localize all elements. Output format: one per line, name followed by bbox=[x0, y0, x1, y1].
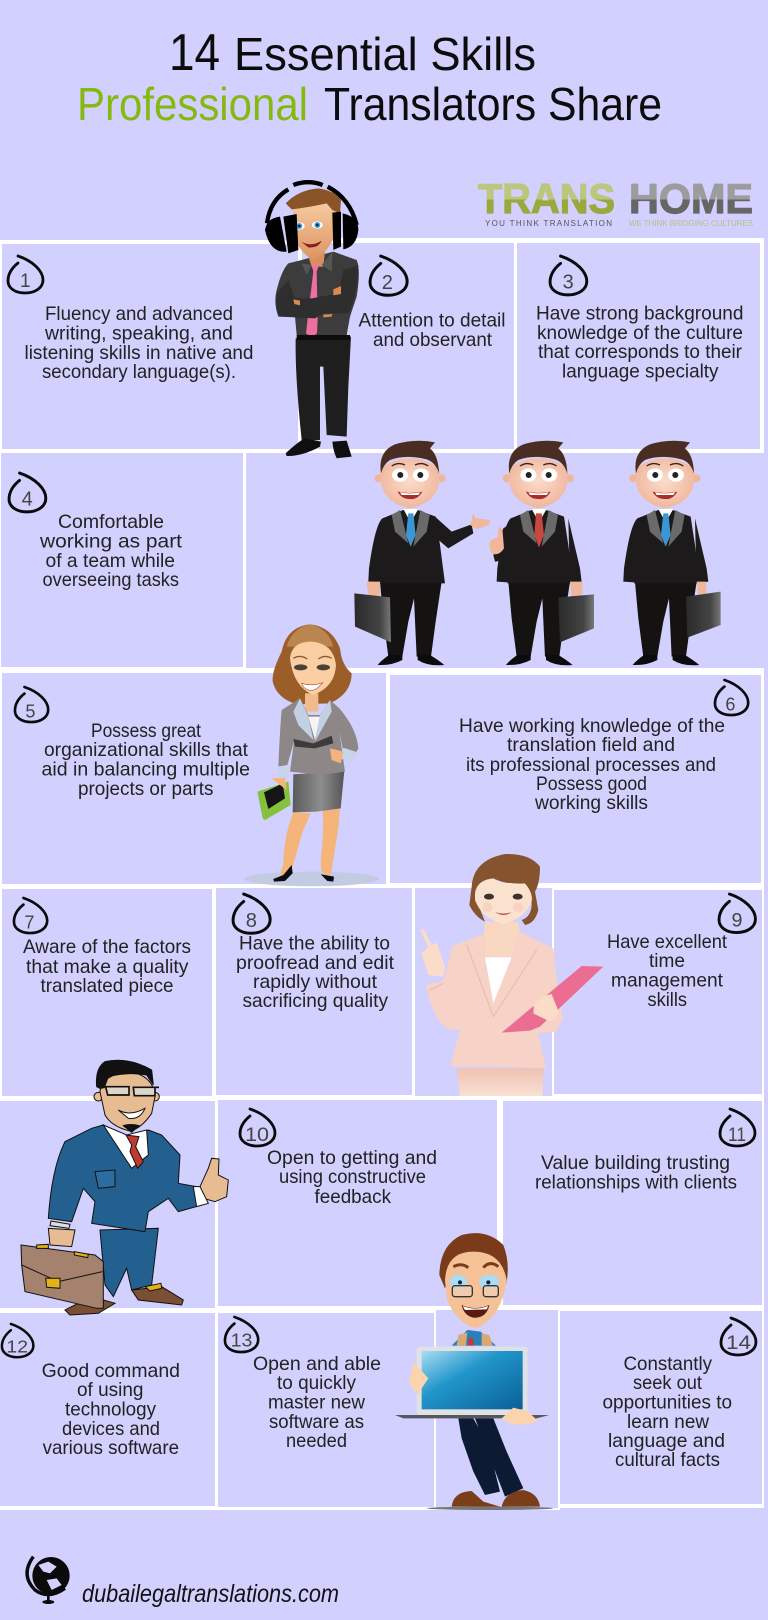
text 6: working skills bbox=[534, 792, 648, 814]
panel: businessman backdrop bbox=[0, 1101, 215, 1308]
title: 14 bbox=[169, 24, 220, 82]
panel 10 bbox=[218, 1100, 497, 1306]
text 9: Have excellent bbox=[607, 931, 728, 953]
badge 14 bbox=[721, 1318, 756, 1355]
panel 13 bbox=[218, 1313, 434, 1507]
text 13: needed bbox=[286, 1430, 347, 1452]
text 5: Possess great bbox=[91, 720, 202, 742]
text 12: Good command bbox=[42, 1360, 180, 1382]
title: Essential Skills bbox=[234, 28, 536, 80]
text 1: Fluency and advanced bbox=[45, 303, 233, 325]
text 7: translated piece bbox=[40, 975, 174, 997]
panel 6 bbox=[390, 675, 761, 883]
text 2: and observant bbox=[373, 329, 493, 351]
figure: three businessmen with briefcases bbox=[354, 441, 721, 665]
text 5 bbox=[42, 720, 250, 800]
panel 4 bbox=[1, 453, 243, 667]
badge 11 bbox=[720, 1109, 755, 1146]
text 3: knowledge of the culture bbox=[537, 322, 743, 344]
panel 9 bbox=[554, 890, 762, 1094]
text 8: Have the ability to bbox=[239, 932, 390, 954]
logo: Trans Home: TRANS bbox=[478, 175, 615, 222]
text 8: proofread and edit bbox=[236, 952, 395, 974]
text 3 bbox=[536, 302, 744, 382]
text 12 bbox=[42, 1360, 180, 1459]
badge 3 bbox=[550, 256, 587, 295]
text 4: Comfortable bbox=[58, 511, 164, 533]
text 9: management bbox=[611, 970, 724, 992]
text 7 bbox=[23, 936, 191, 997]
text 12: various software bbox=[43, 1437, 179, 1459]
panel 14 bbox=[560, 1311, 762, 1504]
text 13: software as bbox=[269, 1411, 364, 1433]
text 14: cultural facts bbox=[615, 1449, 720, 1471]
figure: man holding laptop bbox=[395, 1233, 553, 1510]
white panel frame bbox=[0, 238, 764, 1510]
text 14: Constantly bbox=[624, 1353, 712, 1375]
text 2 bbox=[358, 310, 506, 351]
panel 1 bbox=[2, 244, 298, 449]
text 10 bbox=[267, 1147, 437, 1208]
text 7: Aware of the factors bbox=[23, 936, 191, 958]
badge 6 bbox=[715, 680, 748, 715]
text 5: projects or parts bbox=[78, 778, 214, 800]
badge 13: 13 bbox=[231, 1330, 252, 1350]
badge 7 bbox=[14, 898, 47, 933]
text 14 bbox=[602, 1353, 732, 1471]
text 12: devices and bbox=[62, 1418, 160, 1440]
text 11: relationships with clients bbox=[535, 1172, 737, 1194]
text 9: time bbox=[649, 950, 685, 972]
text 11 bbox=[535, 1152, 737, 1194]
text 6: translation field and bbox=[507, 734, 675, 756]
businessman 1 pointing bbox=[354, 441, 490, 665]
panel: team illustration backdrop bbox=[246, 453, 768, 668]
businessman 2 thumbs up bbox=[489, 441, 594, 665]
text 3: Have strong background bbox=[536, 302, 744, 324]
panel 11 bbox=[503, 1101, 762, 1305]
panel 2 bbox=[302, 243, 514, 449]
badge 8: 8 bbox=[246, 910, 257, 932]
badge 2 bbox=[370, 256, 407, 295]
text 2: Attention to detail bbox=[358, 310, 506, 332]
text 4 bbox=[39, 511, 183, 591]
text 5: aid in balancing multiple bbox=[42, 758, 250, 780]
panel 12 bbox=[0, 1313, 215, 1506]
text 13 bbox=[253, 1353, 381, 1452]
badge 4: 4 bbox=[22, 489, 33, 511]
text 4: overseeing tasks bbox=[42, 569, 179, 591]
logo: Trans Home bbox=[478, 175, 753, 228]
badge 11: 11 bbox=[728, 1125, 746, 1146]
panel: woman backdrop bbox=[415, 888, 552, 1096]
badge 2: 2 bbox=[382, 272, 393, 294]
title: Professional bbox=[77, 78, 308, 130]
figure: man with headphones bbox=[265, 182, 359, 458]
badge 12 bbox=[2, 1324, 33, 1357]
text 13: to quickly bbox=[277, 1372, 356, 1394]
logo: Trans Home: HOME bbox=[629, 175, 753, 222]
text 1: listening skills in native and bbox=[24, 342, 254, 364]
text 8: rapidly without bbox=[253, 971, 378, 993]
panel 8 bbox=[216, 888, 412, 1095]
footer: website: dubailegaltranslations.com bbox=[82, 1580, 339, 1608]
panel 5 bbox=[2, 673, 386, 884]
logo: Trans Home: YOU THINK TRANSLATION bbox=[485, 219, 612, 228]
businessman 3 bbox=[623, 441, 721, 665]
text 3: that corresponds to their bbox=[538, 341, 742, 363]
badge 12: 12 bbox=[6, 1338, 28, 1357]
logo: Trans Home: WE THINK BRIDGING CULTURES bbox=[629, 219, 753, 228]
text 9 bbox=[607, 931, 728, 1011]
badge 14: 14 bbox=[726, 1333, 752, 1354]
text 6: its professional processes and bbox=[466, 754, 716, 776]
text 6: Possess good bbox=[536, 773, 647, 795]
text 1 bbox=[24, 303, 254, 383]
text 12: technology bbox=[65, 1398, 156, 1420]
text 1: writing, speaking, and bbox=[44, 322, 233, 344]
text 10: Open to getting and bbox=[267, 1147, 437, 1169]
text 13: Open and able bbox=[253, 1353, 381, 1375]
figure: businesswoman with green folder bbox=[244, 624, 379, 886]
badge 1 bbox=[8, 256, 43, 293]
panel 7 bbox=[2, 889, 212, 1096]
text 10: feedback bbox=[314, 1186, 391, 1208]
text 8: sacrificing quality bbox=[242, 990, 388, 1012]
text 4: working as part bbox=[39, 530, 183, 552]
figure: woman in pink suit with clipboard bbox=[420, 854, 603, 1096]
title: Translators Share bbox=[324, 78, 662, 130]
title bbox=[77, 24, 662, 130]
text 4: of a team while bbox=[46, 550, 175, 572]
badge 8 bbox=[233, 894, 270, 933]
text 6: Have working knowledge of the bbox=[459, 715, 725, 737]
figure: businessman in blue suit with briefcase bbox=[21, 1060, 228, 1315]
badge 1: 1 bbox=[20, 271, 31, 292]
text 14: seek out bbox=[633, 1372, 703, 1394]
text 5: organizational skills that bbox=[44, 739, 249, 761]
panel 3 bbox=[517, 243, 760, 449]
badge 5: 5 bbox=[25, 701, 35, 721]
text 11: Value building trusting bbox=[541, 1152, 730, 1174]
panel: laptop man backdrop bbox=[436, 1310, 558, 1508]
text 13: master new bbox=[268, 1392, 366, 1414]
text 12: of using bbox=[77, 1379, 144, 1401]
badge 7: 7 bbox=[24, 912, 34, 932]
badge 9: 9 bbox=[732, 909, 743, 931]
text 14: learn new bbox=[627, 1411, 710, 1433]
badge 10 bbox=[240, 1109, 275, 1146]
footer: globe icon bbox=[27, 1557, 70, 1604]
badge 3: 3 bbox=[563, 272, 574, 294]
badge 9 bbox=[719, 894, 755, 933]
text 9: skills bbox=[648, 989, 687, 1011]
badge 10: 10 bbox=[245, 1125, 269, 1146]
text 14: language and bbox=[608, 1430, 725, 1452]
badge 5 bbox=[15, 687, 48, 722]
text 3: language specialty bbox=[562, 360, 719, 382]
text 1: secondary language(s). bbox=[42, 361, 236, 383]
badge 6: 6 bbox=[725, 694, 735, 714]
text 8 bbox=[236, 932, 395, 1012]
badge 13 bbox=[225, 1317, 258, 1352]
text 10: using constructive bbox=[279, 1166, 426, 1188]
text 6 bbox=[459, 715, 725, 814]
text 7: that make a quality bbox=[26, 956, 189, 978]
badge 4 bbox=[9, 473, 46, 512]
text 14: opportunities to bbox=[602, 1392, 732, 1414]
